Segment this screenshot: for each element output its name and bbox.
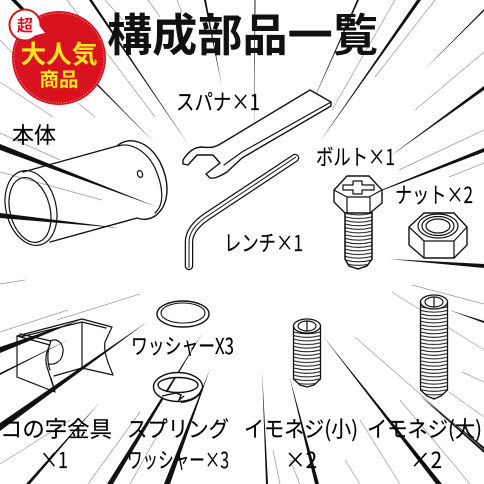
label: washer: ワッシャーX3 [131,329,234,361]
label: bolt: ボルト×1 [316,140,395,172]
icon: large set screw [420,295,448,399]
badge: popular item: 超 [17,17,33,35]
badge: popular item: 大人気 [20,41,98,69]
icon: spring washer [153,372,203,402]
badge: popular item: 商品 [40,69,78,91]
icon: bracket [17,319,113,392]
label: small set screw: イモネジ(小) [244,412,358,444]
icon: body tube [0,141,167,251]
label: large set screw quantity: ×2 [410,443,442,475]
icon: bolt [334,176,382,269]
label: spanner: スパナ×1 [176,85,260,117]
label: bracket: コの字金具 [0,412,112,444]
label: spring washer second line: ワッシャー×3 [127,443,229,475]
label: spring washer: スプリング [127,412,229,444]
label: wrench: レンチ×1 [224,226,303,258]
icon: small set screw [294,319,320,387]
label: small set screw quantity: ×2 [285,443,317,475]
icon: washer [157,301,209,327]
icon: hex wrench [189,157,296,268]
icon: nut [409,213,467,258]
label: bracket quantity: ×1 [40,443,68,475]
label: body: 本体 [12,118,56,150]
title: 構成部品一覧 [107,10,378,61]
icon: spanner [183,90,331,178]
badge: popular item [10,10,106,105]
